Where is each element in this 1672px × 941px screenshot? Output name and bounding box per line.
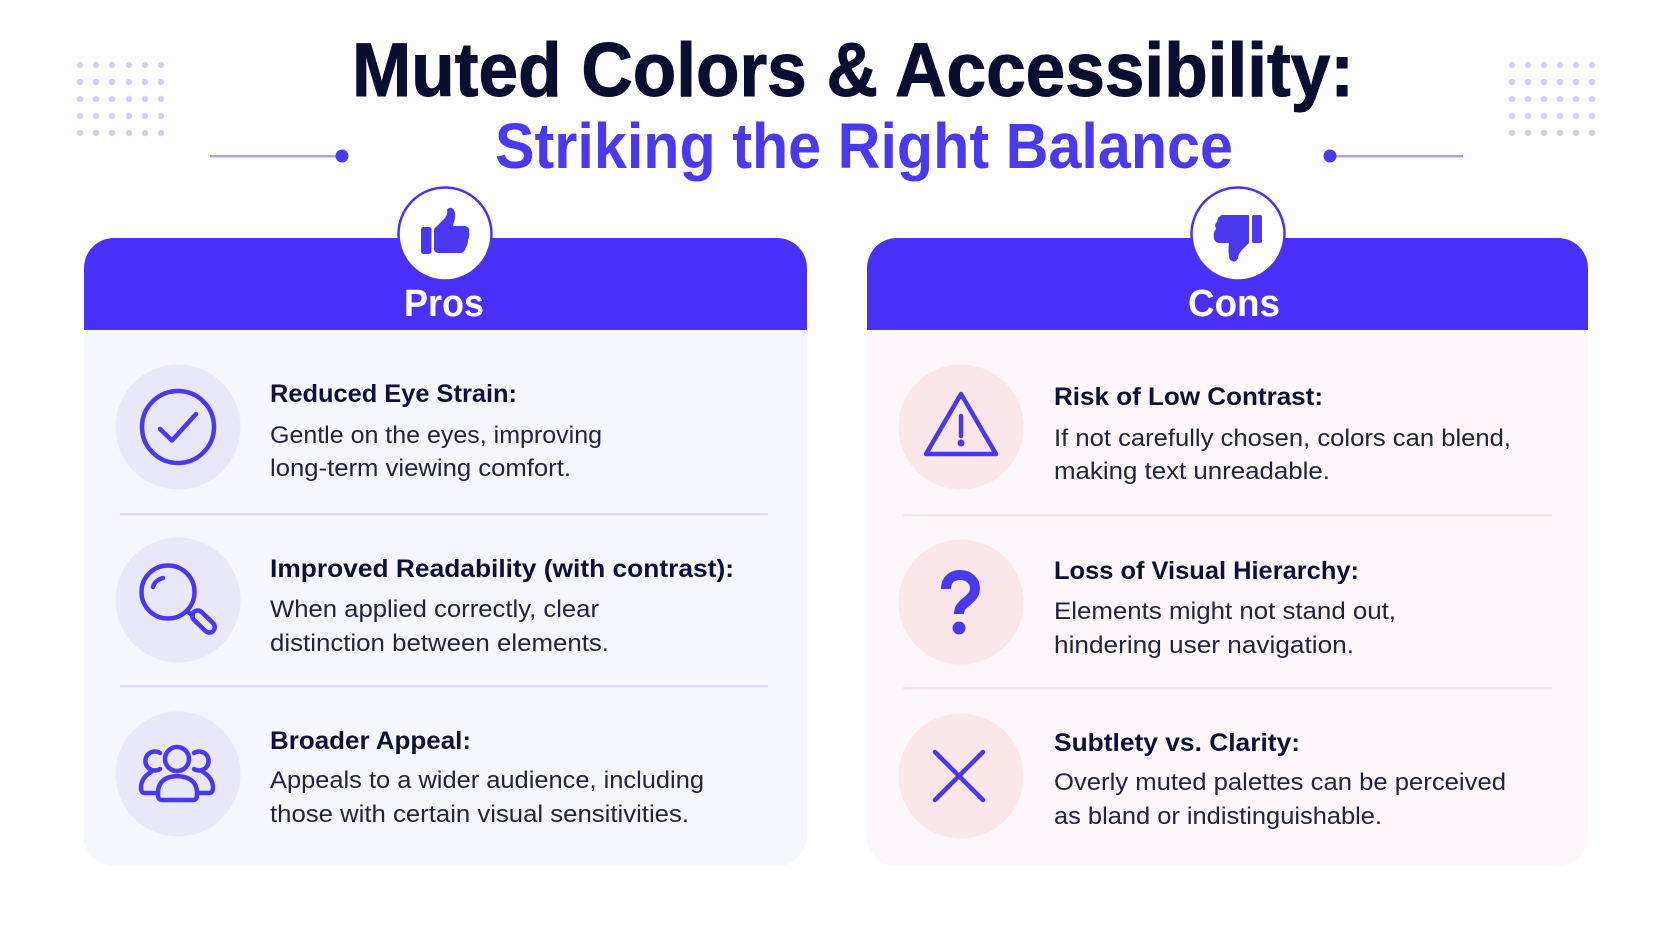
icon: thumbs down — [1192, 188, 1284, 280]
text: subtlety vs clarity: as bland or indistinguishable. — [1054, 803, 1382, 830]
item: loss of visual hierarchy — [898, 540, 1396, 664]
text: broader appeal: those with certain visual sensitivities. — [270, 801, 689, 828]
icon: warning triangle — [898, 364, 1024, 490]
text: risk of low contrast: If not carefully chosen, colors can blend, — [1054, 425, 1511, 452]
item: reduced eye strain — [116, 364, 602, 490]
text: improved readability: distinction between elements. — [270, 630, 609, 657]
text: reduced eye strain: Reduced Eye Strain: — [270, 380, 517, 408]
item: risk of low contrast — [898, 364, 1511, 490]
text: improved readability: Improved Readability (with contrast): — [270, 555, 734, 583]
text: subtlety vs clarity: Subtlety vs. Clarity: — [1054, 729, 1300, 757]
text: risk of low contrast — [1054, 383, 1511, 485]
icon: people — [116, 712, 240, 836]
panel: cons — [867, 188, 1588, 866]
panel header: cons — [867, 238, 1588, 330]
text: risk of low contrast: Risk of Low Contrast: — [1054, 383, 1323, 411]
panel: pros — [84, 188, 807, 866]
icon: thumbs up — [398, 188, 492, 280]
accent line: right — [1324, 150, 1463, 162]
subtitle: Striking the Right Balance — [495, 110, 1233, 182]
text: reduced eye strain: Gentle on the eyes, improving — [270, 422, 602, 449]
decorative dots: left — [77, 62, 164, 136]
text: loss of visual hierarchy: hindering user navigation. — [1054, 632, 1354, 659]
text: risk of low contrast: making text unreadable. — [1054, 458, 1330, 485]
icon: check circle — [116, 364, 240, 490]
text: broader appeal: Broader Appeal: — [270, 727, 471, 755]
item: improved readability — [116, 538, 734, 662]
panel body: pros — [84, 290, 807, 866]
title: Muted Colors & Accessibility: — [352, 28, 1354, 113]
item: subtlety vs clarity — [898, 714, 1506, 838]
accent line: left — [210, 150, 348, 162]
text: loss of visual hierarchy: Loss of Visual Hierarchy: — [1054, 557, 1359, 585]
text: loss of visual hierarchy: Elements might not stand out, — [1054, 598, 1396, 625]
text: broader appeal: Appeals to a wider audience, including — [270, 767, 704, 794]
panel header: pros — [84, 238, 807, 330]
panel body: cons — [867, 290, 1588, 866]
icon: magnifier — [116, 538, 240, 662]
heading: pros: Pros — [404, 283, 484, 325]
decorative dots: right — [1509, 62, 1595, 136]
item: broader appeal — [116, 712, 704, 836]
heading: cons: Cons — [1188, 283, 1280, 325]
icon: question mark — [898, 540, 1024, 664]
icon: cross — [898, 714, 1024, 838]
text: subtlety vs clarity — [1054, 729, 1506, 830]
text: reduced eye strain — [270, 380, 602, 482]
text: improved readability — [270, 555, 734, 657]
text: subtlety vs clarity: Overly muted palettes can be perceived — [1054, 769, 1506, 796]
text: loss of visual hierarchy — [1054, 557, 1396, 659]
text: broader appeal — [270, 727, 704, 828]
text: reduced eye strain: long-term viewing comfort. — [270, 455, 571, 482]
text: improved readability: When applied correctly, clear — [270, 596, 599, 623]
